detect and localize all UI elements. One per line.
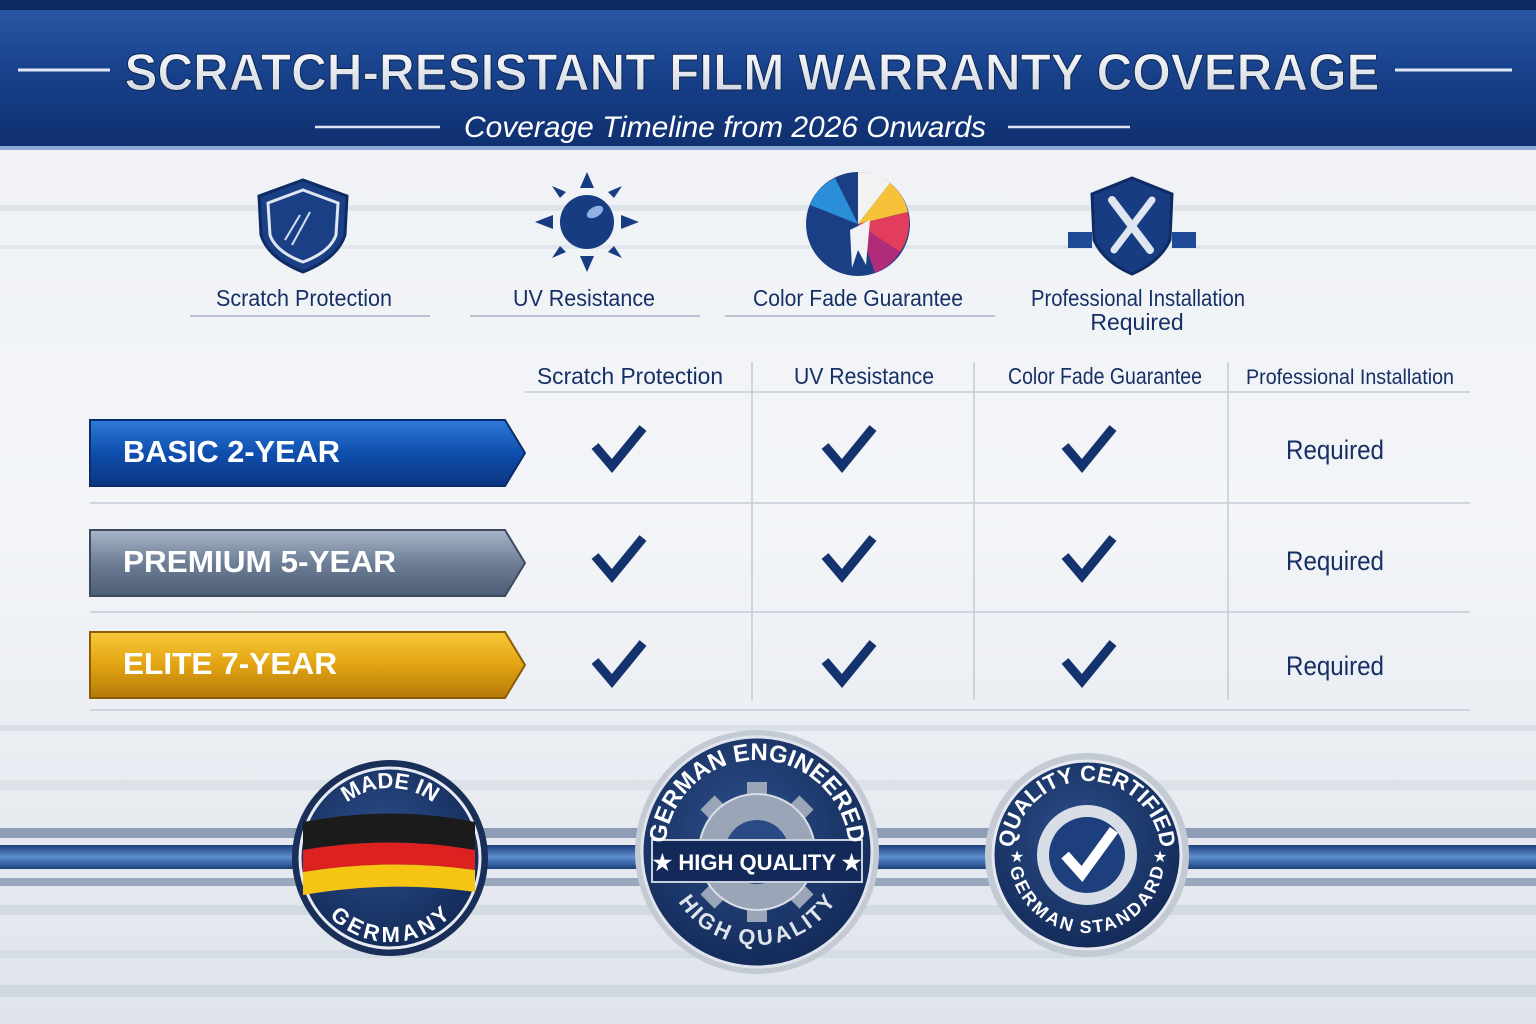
badge: quality certified: GERMAN STANDARD [1011,866,1163,934]
row: basic [90,420,525,486]
column headers [537,363,1454,389]
column headers: Scratch Protection [537,363,723,389]
icon labels: Color Fade Guarantee [753,285,963,311]
icon labels: Scratch Protection [216,285,392,311]
icon: shield [259,180,347,272]
icon: color wheel [806,172,910,276]
icon labels: Required [1090,309,1184,335]
row: premium: PREMIUM 5-YEAR [123,544,396,579]
column headers: UV Resistance [794,363,934,389]
blue stripe band [0,828,1536,886]
badge: german engineered [635,730,879,974]
required labels [1286,435,1384,681]
badge: german engineered: HIGH QUALITY [678,892,832,950]
table [90,362,1470,710]
icon labels: UV Resistance [513,285,655,311]
badge: made in germany [292,760,488,956]
badge: quality certified: ★ [1153,849,1167,866]
badge: german engineered: GERMAN ENGINEERED [650,743,864,842]
column headers: Color Fade Guarantee [1008,363,1202,389]
header band [0,0,1536,150]
badge: german engineered: ★ HIGH QUALITY ★ [653,850,862,875]
row: premium [90,530,525,596]
badge: quality certified [985,753,1189,957]
required labels: Required [1286,546,1384,576]
badge: quality certified: ★ [1010,849,1024,866]
badge: made in germany: MADE IN [340,773,440,802]
required labels: Required [1286,435,1384,465]
row: elite [90,632,525,698]
icon: tools badge [1068,178,1196,274]
checkmarks [595,428,1113,681]
badge: quality certified: QUALITY CERTIFIED [999,766,1174,846]
title: SCRATCH-RESISTANT FILM WARRANTY COVERAGE [124,44,1380,102]
column headers: Professional Installation [1246,366,1454,389]
badge: made in germany: GERMANY [332,905,446,942]
icon: sun [535,172,639,272]
row: basic: BASIC 2-YEAR [123,434,340,469]
icon labels: Professional Installation [1031,285,1245,311]
icon labels [190,285,1245,335]
required labels: Required [1286,651,1384,681]
row: elite: ELITE 7-YEAR [123,646,337,681]
subtitle: Coverage Timeline from 2026 Onwards [464,111,986,144]
